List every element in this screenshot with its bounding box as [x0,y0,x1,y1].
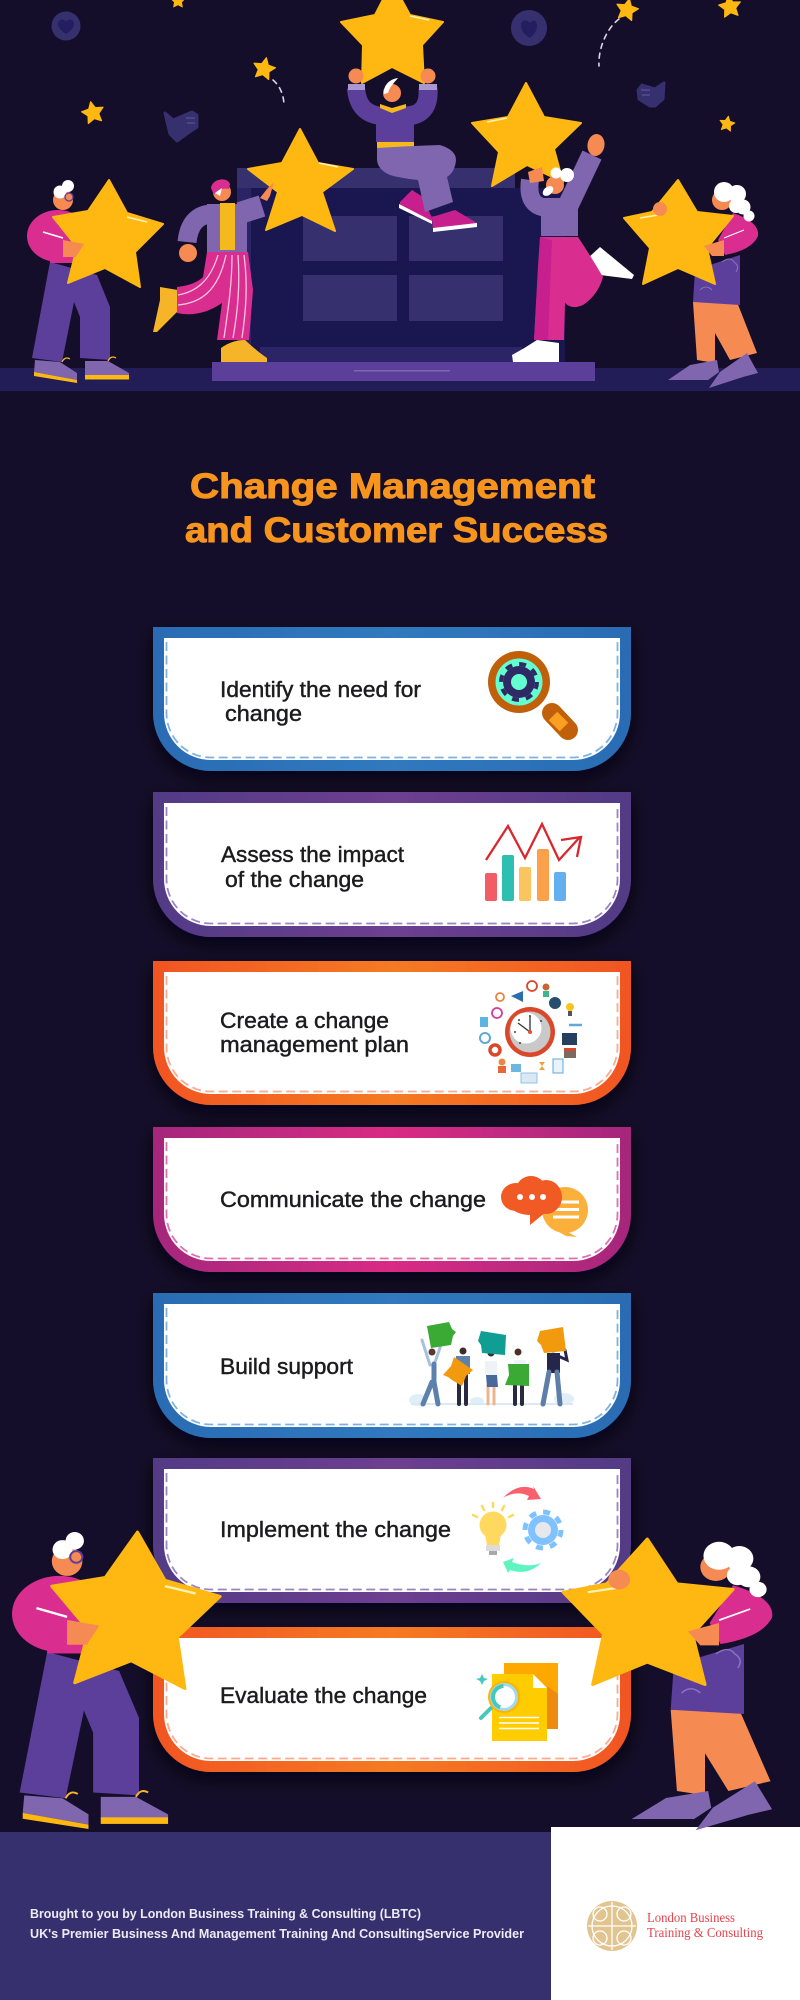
panel: evaluate the change [153,1627,631,1772]
footer text: Brought to you by London Business Training & Consulting (LBTC) [30,1906,421,1921]
step text: Evaluate the change [220,1683,427,1708]
hero illustration [0,0,800,391]
panel: create a change management plan [153,961,631,1105]
step text [221,842,404,892]
logo text: London Business [647,1910,735,1925]
footer text [30,1906,524,1941]
person: man sitting with star [341,0,477,232]
person: woman with large star, footer [563,1539,772,1830]
icon: red arrow [503,1486,541,1500]
icon: bulb, gear and arrows [473,1486,561,1573]
icon: knot brain logo [587,1901,637,1951]
person: man with glasses and star [27,180,163,383]
icon: speech bubbles [501,1176,588,1237]
step text: Implement the change [220,1517,451,1542]
logo text: Training & Consulting [647,1925,763,1940]
title: Change Management [190,467,595,506]
person: jumping woman with star [472,83,634,362]
dashed arcs [273,19,619,106]
step text: Assess the impact [221,842,404,867]
step text: Build support [220,1354,353,1379]
person: woman in pink trousers with star [153,129,353,362]
logo panel [551,1827,800,2000]
icon: bar chart with arrow [485,824,581,901]
icon: magnifier with gear [488,651,568,730]
title [185,467,608,550]
step text: Create a change [220,1008,389,1033]
icon: team holding puzzle pieces [409,1322,574,1406]
step text: Identify the need for [220,677,421,702]
panel: communicate the change [153,1127,631,1272]
small stars [80,0,742,132]
icon: clock with planning items [480,981,582,1083]
footer text: UK's Premier Business And Management Training And ConsultingService Provider [30,1926,524,1941]
icon: heart badge left [52,12,80,40]
step text [220,1008,409,1057]
logo text [647,1910,763,1940]
title: and Customer Success [185,511,608,550]
icon: green arrow [503,1558,541,1573]
step text: Communicate the change [220,1187,486,1212]
icon: thumbs up right [638,83,664,106]
step text [220,677,421,726]
panel: identify the need for change [153,627,631,771]
icon: heart badge right [511,10,547,46]
panel: assess the impact [153,792,631,937]
step text: management plan [220,1032,409,1057]
panel: implement the change [153,1458,631,1603]
footer band [0,1832,551,2000]
panel: build support [153,1293,631,1438]
person: man with large star, footer [12,1532,220,1829]
icon: thumbs up left [165,112,197,141]
step text: of the change [225,867,364,892]
floor band [0,368,800,391]
person: woman with white hair and star [624,180,758,388]
icon: document with magnifier [476,1663,558,1741]
building [212,168,595,381]
step text: change [225,701,302,726]
